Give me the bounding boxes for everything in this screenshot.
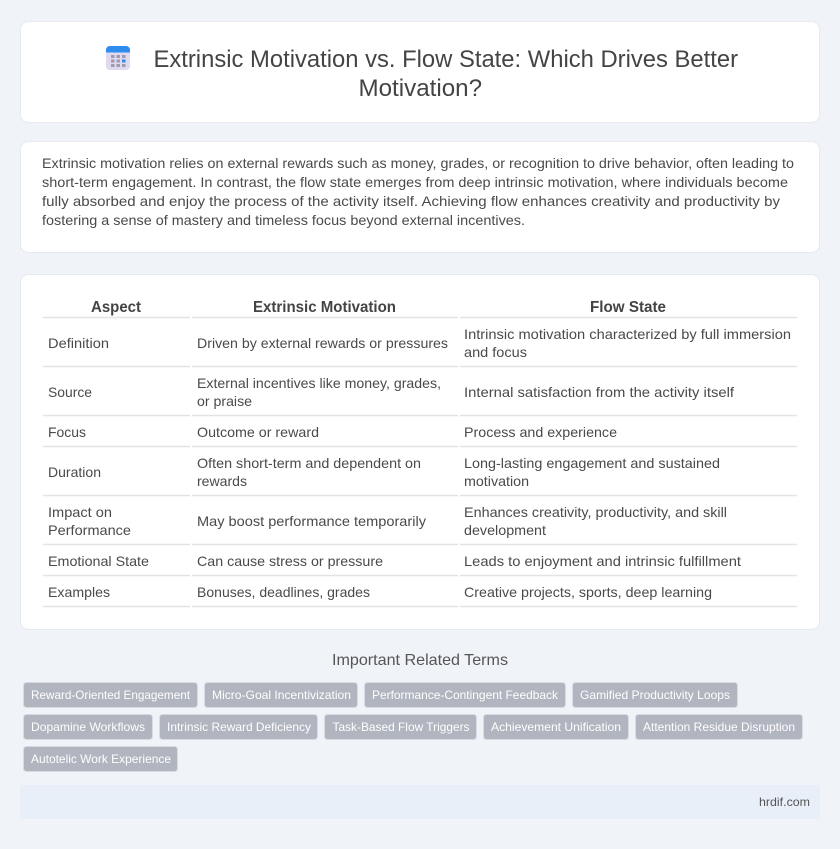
tag xyxy=(204,682,358,708)
tag xyxy=(24,746,178,772)
row: duration: Long-lasting engagement and sustained xyxy=(464,455,720,471)
row: impact on performance: Impact on xyxy=(48,504,112,520)
text block: introduction: fostering a sense of mastery and timeless focus beyond external incentives. xyxy=(42,212,525,228)
row: duration xyxy=(48,455,720,489)
panel: introduction xyxy=(20,142,820,252)
row: focus: Process and experience xyxy=(464,424,617,440)
tag xyxy=(24,682,198,708)
tag xyxy=(484,714,628,740)
tag: Performance-Contingent Feedback xyxy=(372,688,559,702)
row: impact on performance: May boost performance temporarily xyxy=(197,513,426,529)
title xyxy=(154,46,738,102)
text block: introduction: short-term engagement. In contrast, the flow state emerges from deep intrinsic motivation, where individuals become xyxy=(42,174,788,190)
row: source: Internal satisfaction from the activity itself xyxy=(464,384,734,400)
row: duration: Often short-term and dependent on xyxy=(197,455,421,471)
row: source xyxy=(48,375,734,409)
panel: comparison table xyxy=(20,274,820,630)
row: impact on performance: Enhances creativity, productivity, and skill xyxy=(464,504,727,520)
tag: Autotelic Work Experience xyxy=(31,752,171,766)
row: focus: Outcome or reward xyxy=(197,424,319,440)
table header xyxy=(91,299,666,316)
row: definition: and focus xyxy=(464,344,527,360)
row: source: or praise xyxy=(197,393,252,409)
table header: Flow State xyxy=(590,299,666,316)
footer xyxy=(20,785,820,819)
row: impact on performance: Performance xyxy=(48,522,131,538)
row: emotional state: Can cause stress or pressure xyxy=(197,553,383,569)
row: definition: Intrinsic motivation characterized by full immersion xyxy=(464,326,791,342)
tag xyxy=(572,682,738,708)
heading: important related terms: Important Related Terms xyxy=(332,652,508,669)
tag: Intrinsic Reward Deficiency xyxy=(167,720,311,734)
row: examples: Creative projects, sports, deep learning xyxy=(464,584,712,600)
tag: Achievement Unification xyxy=(491,720,621,734)
tag: Attention Residue Disruption xyxy=(643,720,795,734)
tag xyxy=(160,714,318,740)
row: emotional state: Leads to enjoyment and intrinsic fulfillment xyxy=(464,553,741,569)
icon: calendar xyxy=(106,46,130,70)
tag xyxy=(24,714,152,740)
row: examples xyxy=(48,584,712,600)
tag xyxy=(636,714,802,740)
tag: Micro-Goal Incentivization xyxy=(212,688,351,702)
row: duration: motivation xyxy=(464,473,529,489)
row: impact on performance xyxy=(48,504,727,538)
tag xyxy=(324,714,476,740)
tag: Gamified Productivity Loops xyxy=(580,688,730,702)
title: Extrinsic Motivation vs. Flow State: Which Drives Better xyxy=(154,46,738,73)
tag xyxy=(364,682,566,708)
row: definition xyxy=(48,326,791,360)
row: focus: Focus xyxy=(48,424,86,440)
row: duration: Duration xyxy=(48,464,101,480)
related term tags xyxy=(24,682,802,772)
text block: introduction: fully absorbed and enjoy the process of the activity itself. Achieving flow enhances creativity and productivity by xyxy=(42,193,780,209)
panel: header xyxy=(20,22,820,122)
row: emotional state xyxy=(48,553,741,569)
row: definition: Definition xyxy=(48,335,109,351)
footer: hrdif.com xyxy=(759,795,810,809)
text block: introduction: Extrinsic motivation relies on external rewards such as money, grades, or recognition to drive behavior, often leading to xyxy=(42,155,794,171)
row: examples: Examples xyxy=(48,584,110,600)
row: definition: Driven by external rewards or pressures xyxy=(197,335,448,351)
row: examples: Bonuses, deadlines, grades xyxy=(197,584,370,600)
row: emotional state: Emotional State xyxy=(48,553,149,569)
table header: Aspect xyxy=(91,299,142,316)
text block: introduction xyxy=(42,155,794,228)
row: source: External incentives like money, grades, xyxy=(197,375,441,391)
tag: Dopamine Workflows xyxy=(31,720,145,734)
row: source: Source xyxy=(48,384,92,400)
table header: Extrinsic Motivation xyxy=(253,299,396,316)
row: focus xyxy=(48,424,617,440)
row: duration: rewards xyxy=(197,473,247,489)
tag: Reward-Oriented Engagement xyxy=(31,688,191,702)
title: Motivation? xyxy=(358,75,482,102)
tag: Task-Based Flow Triggers xyxy=(332,720,470,734)
row: impact on performance: development xyxy=(464,522,546,538)
